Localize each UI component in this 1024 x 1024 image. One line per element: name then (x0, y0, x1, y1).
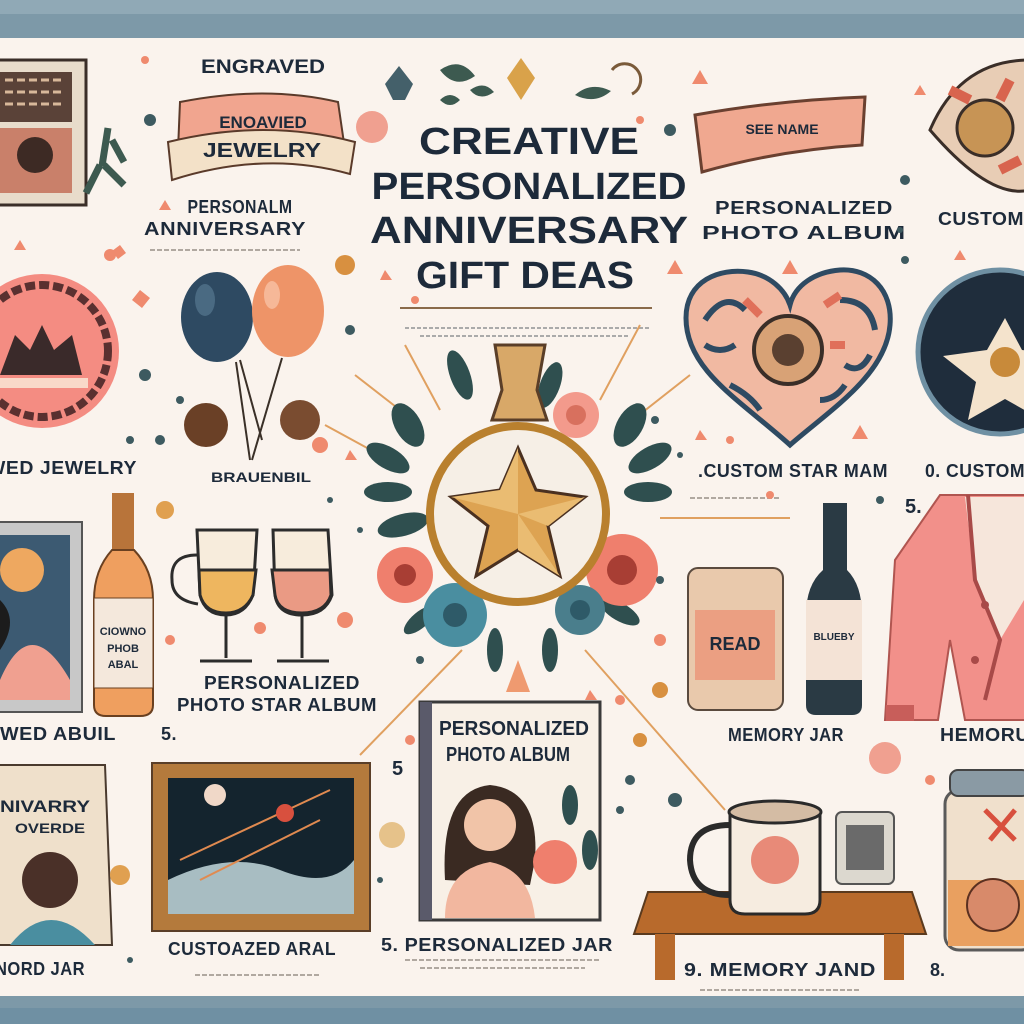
personalized photo album label: PERSONALIZED (715, 198, 893, 218)
engraved jewelry banner (168, 57, 355, 180)
top-right medallion (930, 60, 1024, 191)
leaves (362, 347, 676, 672)
title (370, 121, 688, 297)
fine print lines (150, 250, 860, 990)
number 8: 8. (930, 960, 945, 980)
cardigan (885, 495, 1024, 721)
bag bottom left: NIVARRY (0, 797, 91, 816)
small caption: BRAUENBIL (211, 469, 312, 485)
personalized jar caption: 5. PERSONALIZED JAR (381, 935, 613, 955)
captions row: HEMORU (940, 725, 1024, 745)
central emblem (362, 345, 676, 692)
bottle: PHOB (107, 643, 139, 655)
title: GIFT DEAS (416, 255, 634, 297)
wine bottle (806, 503, 862, 715)
title: ANNIVERSARY (370, 210, 688, 252)
captions row: MEMORY JAR (728, 725, 844, 745)
engraved jewelry banner: ENOAVIED (219, 113, 307, 132)
cardigan: 5. (905, 496, 922, 518)
pink seal (0, 274, 119, 428)
bag bottom left (0, 765, 112, 945)
balloons (181, 265, 324, 460)
bottle (94, 493, 153, 716)
confetti dark (126, 114, 910, 963)
title: CREATIVE (419, 121, 639, 163)
personal label: PERSONALM (188, 197, 292, 217)
personalized photo star album label: PHOTO STAR ALBUM (177, 695, 377, 715)
personalized photo album label: PHOTO ALBUM (702, 223, 906, 243)
bag bottom left: OVERDE (15, 820, 85, 836)
captions row: WED ABUIL (0, 724, 116, 744)
wine glasses (172, 530, 332, 661)
top-right ribbon: SEE NAME (745, 121, 819, 137)
bottle: CIOWNO (100, 626, 147, 638)
custom album caption: CUSTOAZED ARAL (168, 939, 336, 959)
bottle: ABAL (108, 659, 139, 671)
title underline (400, 308, 652, 336)
jar (945, 770, 1024, 950)
custom star map label: .CUSTOM STAR MAM (698, 461, 888, 481)
top-right ribbon (695, 97, 865, 172)
captions row: 5. (161, 724, 177, 744)
confetti (14, 56, 966, 885)
captions row (0, 727, 1024, 741)
rays (325, 325, 790, 810)
table with mug (634, 801, 926, 980)
memory jar caption: 9. MEMORY JAND (684, 960, 876, 980)
crown (492, 345, 547, 420)
medal (430, 426, 606, 602)
photo album book (420, 702, 600, 920)
engraved jewelry banner: JEWELRY (203, 140, 322, 162)
roses (553, 392, 599, 438)
title: PERSONALIZED (372, 166, 686, 208)
number 5: 5 (392, 758, 403, 780)
personalized photo star album label: PERSONALIZED (204, 673, 360, 693)
star map frame (152, 763, 370, 931)
engraved jewelry banner: ENGRAVED (201, 57, 325, 78)
album left (0, 522, 82, 712)
custom label top right: CUSTOM (938, 209, 1024, 229)
top-left book (0, 60, 124, 205)
personalized photo album label (704, 201, 904, 239)
photo album book: PHOTO ALBUM (446, 744, 570, 766)
star plaque (918, 270, 1024, 434)
canister (688, 568, 783, 710)
personalized photo star album label (178, 676, 376, 711)
photo album book: PERSONALIZED (439, 718, 589, 740)
wine bottle: BLUEBY (813, 632, 855, 643)
anniversary label: ANNIVERSARY (144, 219, 306, 239)
canister: READ (709, 634, 761, 654)
top ornaments (356, 58, 641, 143)
heart (686, 270, 890, 445)
